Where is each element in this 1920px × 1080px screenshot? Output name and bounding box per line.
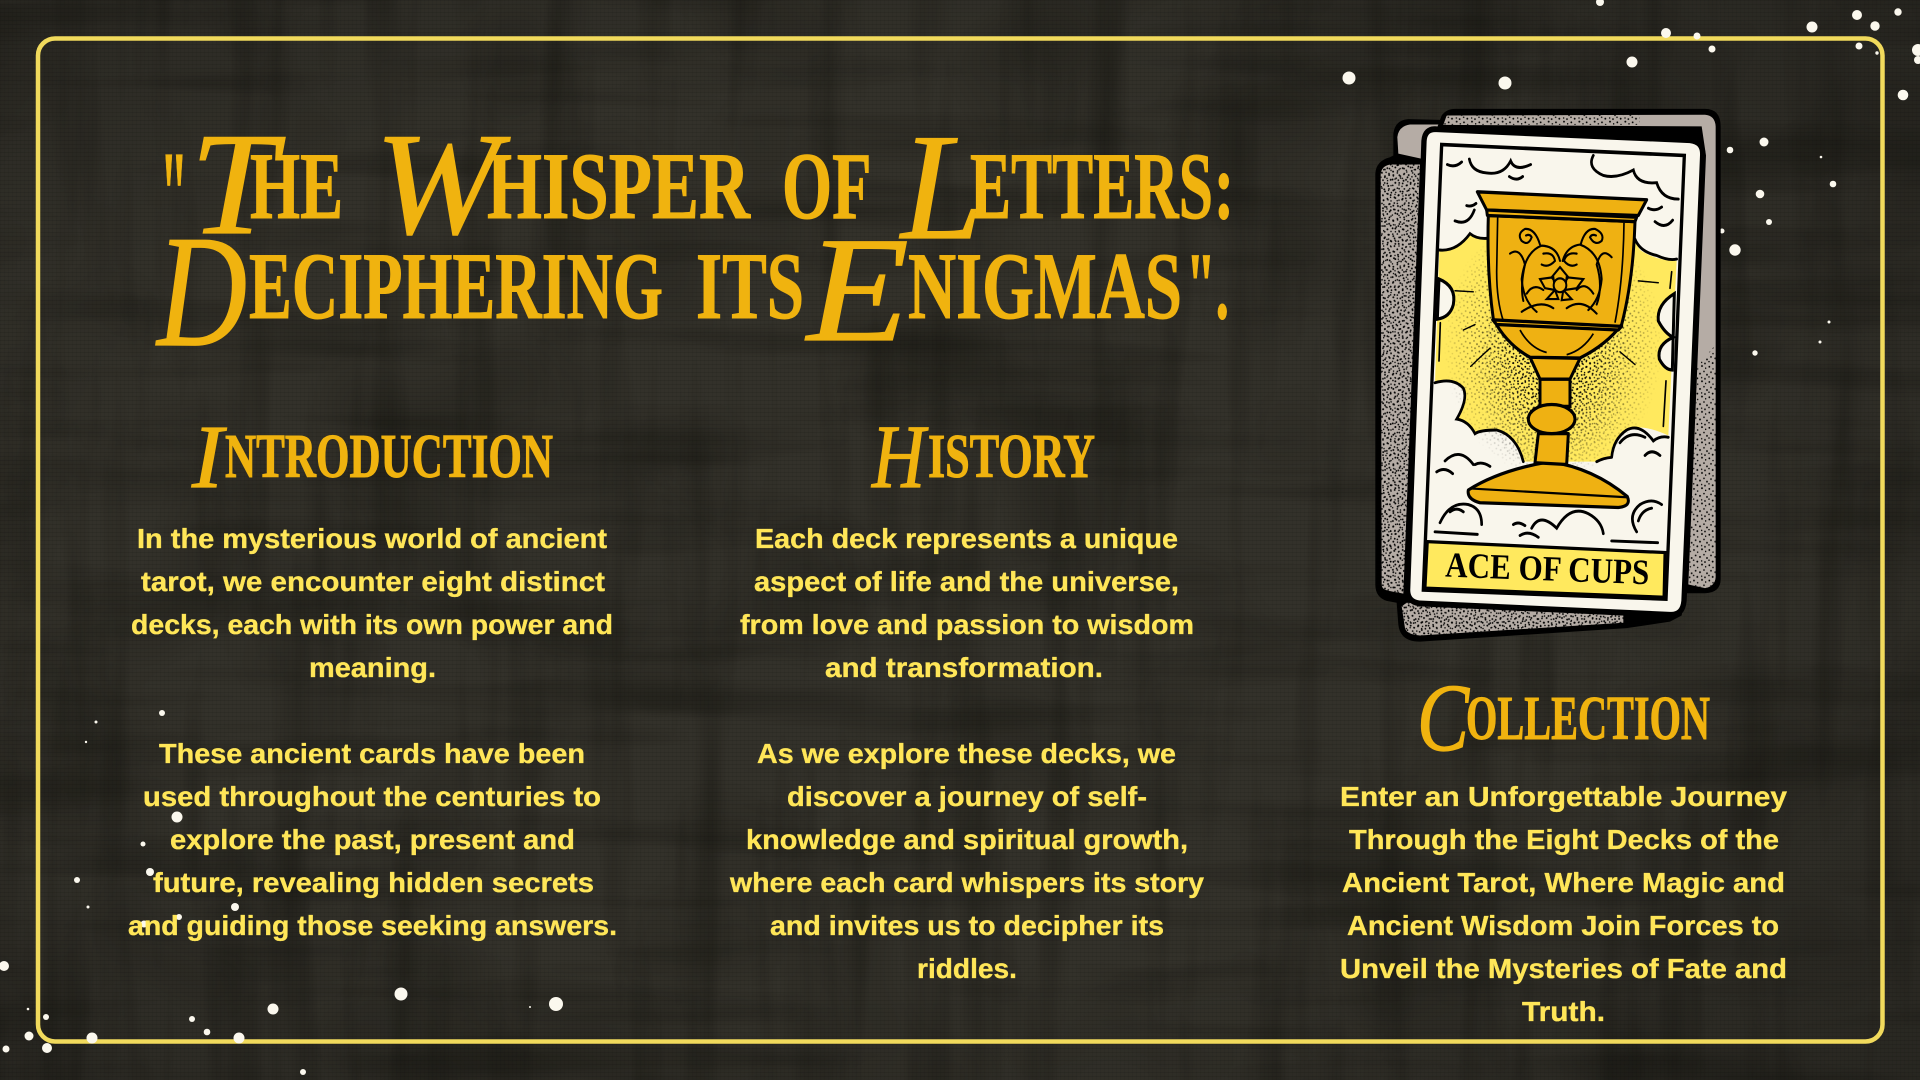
clouds (1435, 155, 1678, 543)
chalice stem (1535, 434, 1568, 465)
heading: Collection: C (1417, 664, 1470, 771)
title: E (805, 207, 909, 373)
heading: History: ISTORY (928, 423, 1095, 491)
title: D (155, 202, 247, 380)
title: ". (1186, 233, 1229, 339)
illustration: tarot card deck, Ace of Cups (1375, 109, 1721, 642)
text: collection paragraph: Unveil the Mysteries of Fate and (1340, 953, 1787, 984)
text: history paragraphs: knowledge and spiritual growth, (746, 824, 1188, 855)
text: history paragraphs (729, 523, 1204, 984)
text: history paragraphs: discover a journey of self- (787, 781, 1147, 812)
text: collection paragraph: Truth. (1522, 996, 1605, 1027)
title: L (899, 103, 983, 271)
text: introduction paragraphs: future, revealing hidden secrets (153, 867, 594, 898)
stipple glow (1446, 246, 1661, 469)
title: ECIPHERING (249, 233, 663, 339)
chalice base (1468, 462, 1628, 507)
chalice (1468, 192, 1647, 507)
card label: ACE OF CUPS (1445, 546, 1650, 593)
heading: Collection: OLLECTION (1466, 685, 1710, 753)
text: introduction paragraphs: decks, each with its own power and (131, 609, 613, 640)
card picture background (1423, 145, 1684, 599)
title: ITS (696, 233, 804, 339)
title: NIGMAS (908, 233, 1182, 339)
text: introduction paragraphs: tarot, we encounter eight distinct (141, 566, 605, 597)
text: introduction paragraphs: explore the past, present and (170, 824, 575, 855)
text: introduction paragraphs: These ancient cards have been (159, 738, 585, 769)
side clouds (1437, 279, 1674, 370)
text: introduction paragraphs: meaning. (309, 652, 436, 683)
text: history paragraphs: Each deck represents a unique (755, 523, 1178, 554)
text: history paragraphs: and transformation. (825, 652, 1103, 683)
text: introduction paragraphs (128, 523, 617, 941)
text: history paragraphs: and invites us to decipher its (770, 910, 1164, 941)
text: introduction paragraphs: and guiding those seeking answers. (128, 910, 617, 941)
text: collection paragraph: Enter an Unforgettable Journey (1340, 781, 1787, 812)
yellow name banner (1425, 542, 1665, 597)
text: collection paragraph: Ancient Tarot, Where Magic and (1342, 867, 1785, 898)
title: W (375, 103, 511, 265)
text: collection paragraph: Through the Eight Decks of the (1349, 824, 1779, 855)
title: T (190, 103, 285, 265)
title: " (160, 125, 188, 269)
yellow sky (1435, 234, 1677, 462)
text: history paragraphs: As we explore these decks, we (757, 738, 1176, 769)
title: HISPER (487, 133, 751, 239)
back cards (1375, 109, 1721, 642)
heading: Introduction: I (191, 408, 227, 507)
heading: Introduction: NTRODUCTION (225, 423, 553, 491)
front card (1408, 129, 1703, 615)
title: : (1214, 133, 1234, 239)
text: introduction paragraphs: In the mysterious world of ancient (137, 523, 607, 554)
title: HE (250, 133, 343, 239)
text: history paragraphs: riddles. (917, 953, 1017, 984)
text: history paragraphs: from love and passion to wisdom (740, 609, 1194, 640)
text: history paragraphs: where each card whispers its story (729, 867, 1204, 898)
text: collection paragraph: Ancient Wisdom Join Forces to (1347, 910, 1779, 941)
title: ETTERS (970, 133, 1213, 239)
text: history paragraphs: aspect of life and the universe, (754, 566, 1179, 597)
chalice ornament (1510, 229, 1612, 314)
text: introduction paragraphs: used throughout the centuries to (143, 781, 601, 812)
heading: History: H (871, 408, 929, 507)
chalice bowl (1488, 215, 1635, 358)
text: collection paragraph (1340, 781, 1787, 1027)
title: OF (782, 133, 869, 239)
